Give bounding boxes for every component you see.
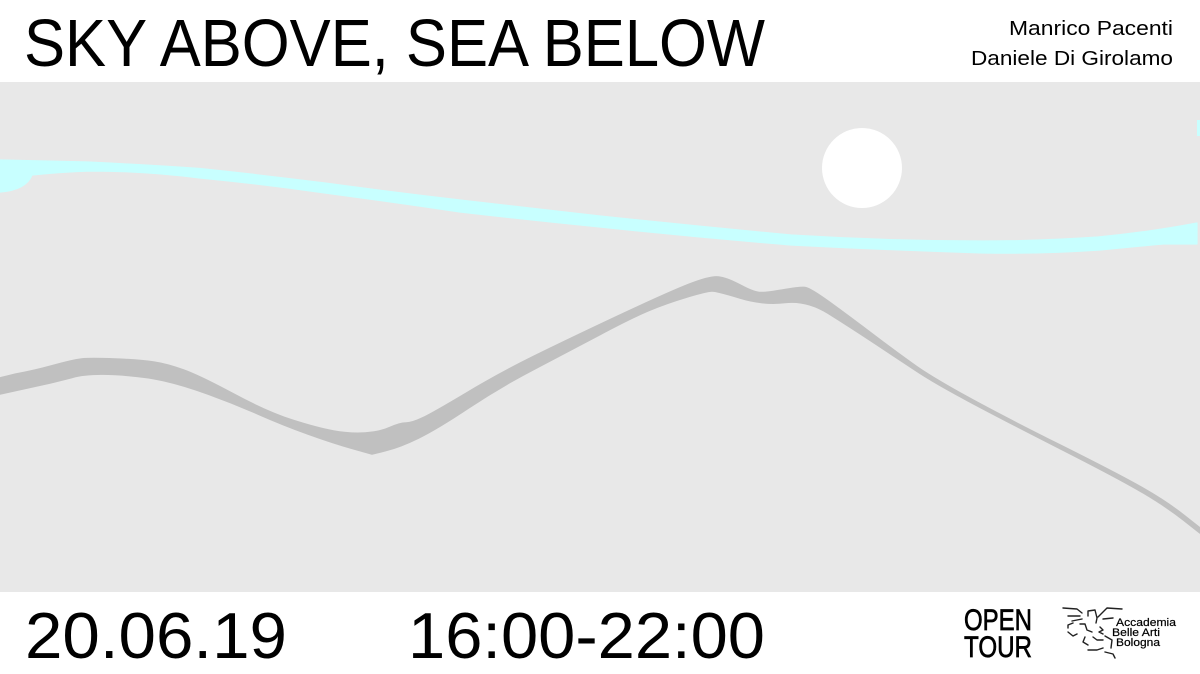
authors: Manrico Pacenti [1009,18,1173,40]
authors: Daniele Di Girolamo [971,48,1173,70]
time: 16:00-22:00 [408,599,765,672]
cyan ribbon fragment at right edge [1197,120,1200,136]
logo text: Accademia [1116,617,1177,629]
icon: white sun [822,128,902,208]
panel: landscape [0,82,1200,592]
authors [971,18,1173,70]
title: SKY ABOVE, SEA BELOW [24,6,766,81]
logo: Open Tour: TOUR [964,631,1032,664]
date: 20.06.19 [25,599,287,672]
logo: Accademia Belle Arti Bologna [1063,608,1177,658]
logo text [1112,617,1177,649]
cyan sky ribbon [0,160,1197,253]
logo: Open Tour: OPEN [964,604,1032,637]
logo text: Bologna [1116,637,1161,649]
logo text: Belle Arti [1112,627,1160,639]
icon: map squiggle [1063,608,1122,658]
logo: Open Tour [964,604,1032,664]
grey mountain ridge [0,277,1200,533]
